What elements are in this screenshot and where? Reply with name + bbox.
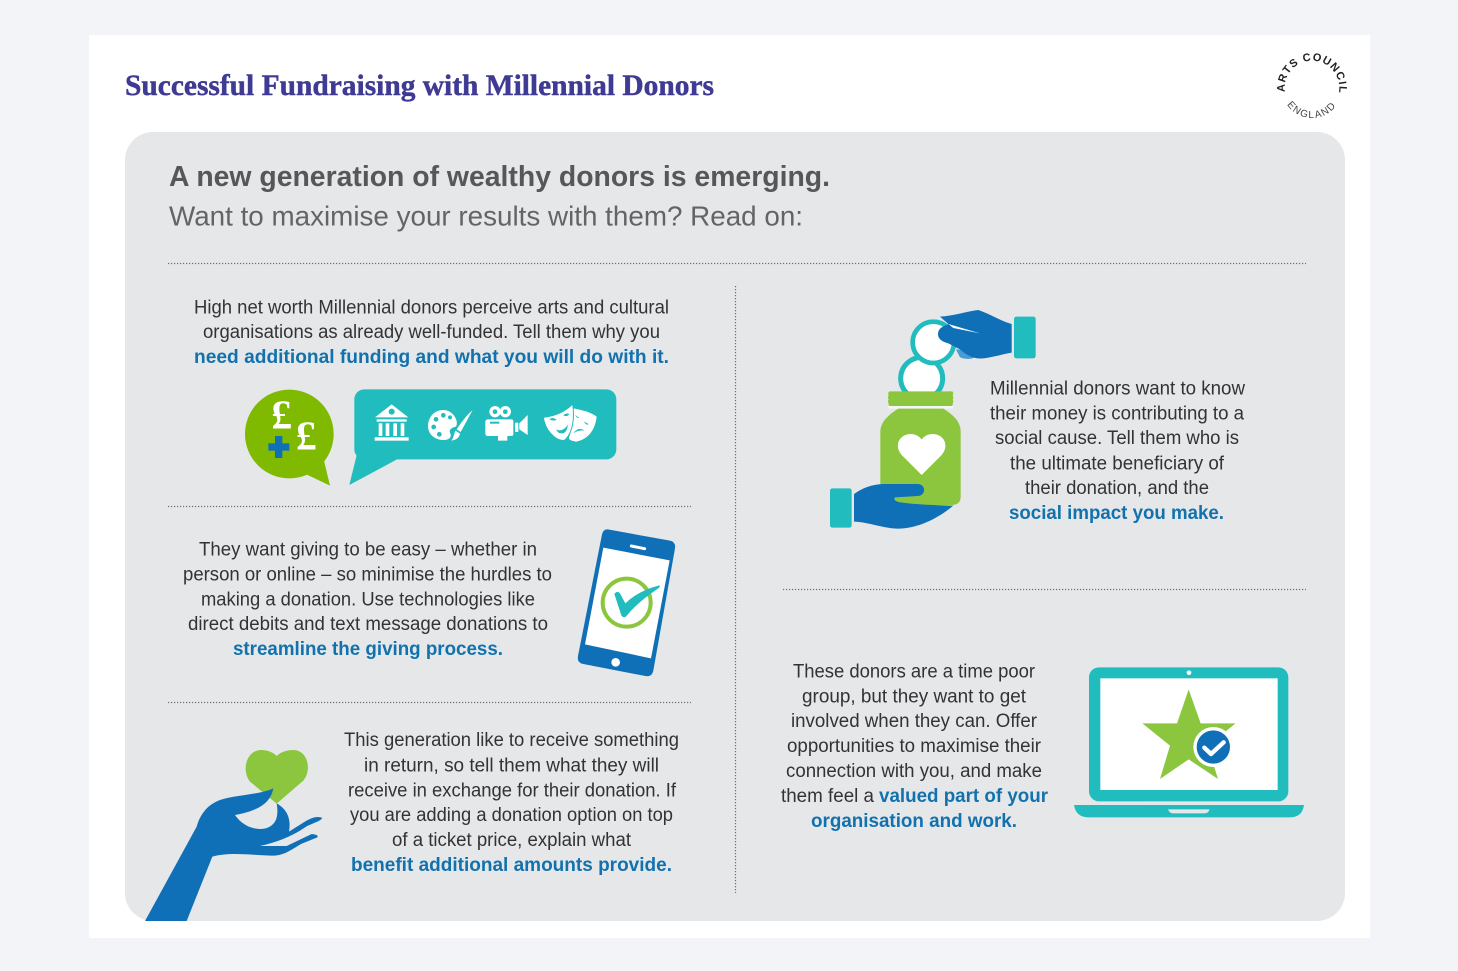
icon: teal arts bubble [349, 389, 616, 485]
text block: time poor: connection with you, and make [786, 761, 1042, 782]
icon: lower hand [830, 484, 953, 529]
text block: time poor [781, 662, 1049, 832]
icon: phone with tick [578, 529, 675, 676]
text block: easy giving [183, 540, 552, 660]
text block: something in return [344, 730, 679, 876]
text block: easy giving: direct debits and text message donations to [188, 614, 548, 635]
text block: additional funding: High net worth Millennial donors perceive arts and cultural [194, 298, 669, 318]
text block: something in return: This generation like to receive something [344, 730, 679, 751]
text block: social cause: the ultimate beneficiary of [1010, 454, 1225, 474]
icon: green pound bubble: £ [296, 413, 317, 459]
text block: easy giving: streamline the giving process. [233, 639, 503, 660]
text block: additional funding: organisations as already well-funded. Tell them why you [203, 322, 660, 343]
icon: jar [880, 391, 961, 505]
icon: laptop with star [1074, 667, 1304, 817]
title: Successful Fundraising with Millennial Donors [125, 69, 714, 102]
icon: coins [901, 322, 954, 399]
icon: theatre masks [543, 404, 597, 442]
text block: social cause [990, 378, 1245, 524]
text block: time poor: involved when they can. Offer [791, 711, 1038, 732]
icon: green pound bubble: £ [271, 392, 292, 438]
text block: time poor: opportunities to maximise their [787, 736, 1042, 757]
text block: social cause: Millennial donors want to know [990, 378, 1245, 400]
text block: additional funding [194, 298, 669, 368]
text block: something in return: in return, so tell them what they will [364, 756, 659, 776]
logo: Arts Council England: ARTS COUNCIL [1277, 53, 1347, 92]
icon: upper hand [938, 310, 1036, 359]
text block: something in return: benefit additional amounts provide. [351, 855, 672, 876]
icon: green pound bubble [245, 390, 334, 486]
text block: easy giving: They want giving to be easy – whether in [199, 540, 537, 560]
text block: time poor: valued part of your [879, 786, 1049, 807]
heading [169, 161, 830, 232]
icon: hand holding heart [145, 750, 322, 921]
text block: time poor: These donors are a time poor [793, 662, 1036, 682]
text block: easy giving: person or online – so minimise the hurdles to [183, 564, 552, 586]
text block: additional funding: need additional funding and what you will do with it. [194, 347, 669, 368]
icon: speech bubbles with pounds and arts symbols [245, 389, 616, 486]
heading: Want to maximise your results with them? Read on: [169, 200, 803, 232]
text block: something in return: of a ticket price, explain what [392, 830, 632, 851]
icon: film camera [485, 406, 528, 441]
icon: palette and brush [428, 410, 473, 441]
text block: easy giving: making a donation. Use technologies like [201, 590, 535, 610]
text block: something in return: receive in exchange for their donation. If [348, 780, 677, 802]
icon: hands, coins and jar [830, 310, 1036, 529]
heading: A new generation of wealthy donors is emerging. [169, 161, 830, 193]
text block: social cause: social impact you make. [1009, 503, 1224, 524]
panel: main grey background [125, 132, 1345, 921]
text block: something in return: you are adding a donation option on top [350, 805, 673, 826]
icon: museum [375, 404, 409, 441]
text block: social cause: their donation, and the [1025, 478, 1209, 499]
text block: social cause: their money is contributing to a [990, 404, 1244, 424]
logo: Arts Council England [1277, 53, 1347, 118]
text block: time poor: organisation and work. [811, 811, 1017, 832]
text block: time poor: them feel a [781, 786, 874, 807]
text block: time poor: group, but they want to get [802, 686, 1027, 708]
text block: social cause: social cause. Tell them who is [995, 428, 1239, 449]
logo: Arts Council England: ENGLAND [1287, 100, 1334, 118]
